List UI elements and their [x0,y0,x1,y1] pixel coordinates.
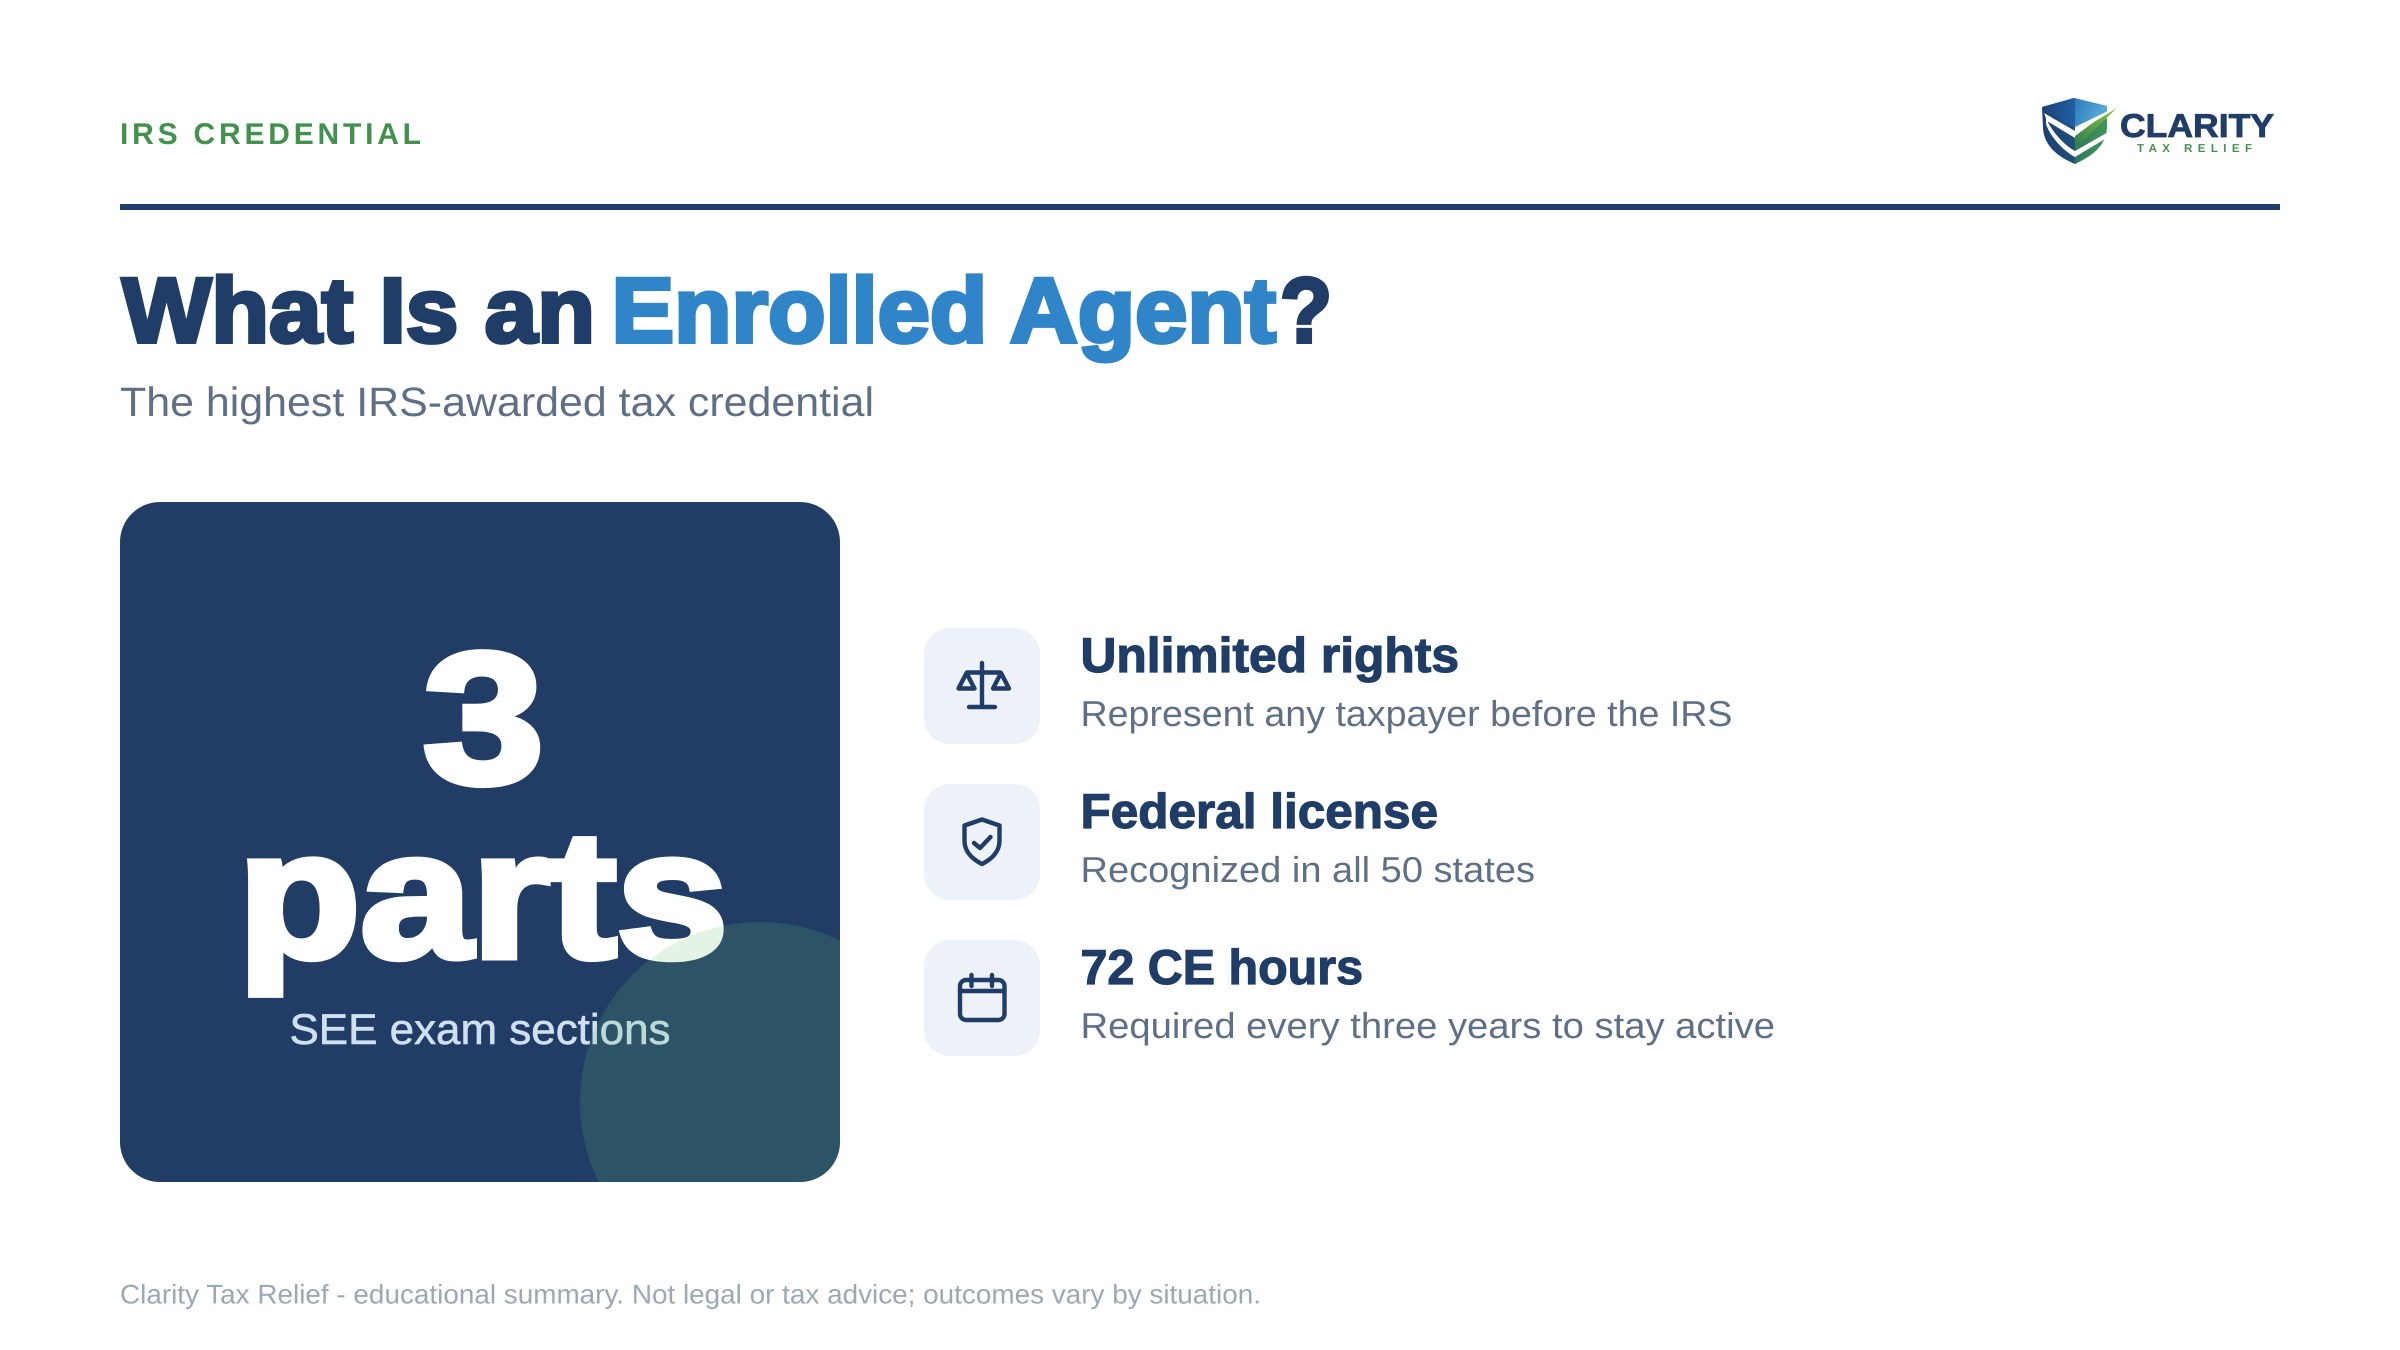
panel: stat card [120,502,840,1182]
item description: Represent any taxpayer before the IRS [1080,693,1732,734]
eyebrow label: IRS CREDENTIAL [120,118,421,151]
icon tile: scales [924,628,1040,744]
big unit: parts [238,795,728,996]
title: Enrolled Agent [612,260,1276,362]
logo: Clarity Tax Relief [2040,96,2274,166]
item heading: 72 CE hours [1080,941,1363,995]
item heading: Federal license [1080,785,1438,839]
logo tagline: TAX RELIEF [2137,143,2252,155]
big number: 3 [423,616,544,822]
logo shield icon [2040,96,2117,166]
card caption: SEE exam sections [290,1006,670,1054]
item description: Recognized in all 50 states [1080,849,1535,890]
decorative green circle [580,922,840,1182]
title: What Is an [122,260,595,362]
footer disclaimer: Clarity Tax Relief - educational summary. Not legal or tax advice; outcomes vary by situation. [120,1280,1261,1310]
card background [120,502,840,1182]
icon tile: calendar [924,940,1040,1056]
item heading: Unlimited rights [1080,629,1459,683]
subtitle: The highest IRS-awarded tax credential [120,379,874,425]
item: Unlimited rights [924,628,1732,744]
logo wordmark: CLARITY [2120,107,2274,144]
item: 72 CE hours [924,940,1775,1056]
title: ? [1280,260,1332,362]
item description: Required every three years to stay active [1080,1005,1775,1046]
icon tile: shield check [924,784,1040,900]
title [122,260,1332,362]
header rule [120,204,2280,210]
item: Federal license [924,784,1535,900]
